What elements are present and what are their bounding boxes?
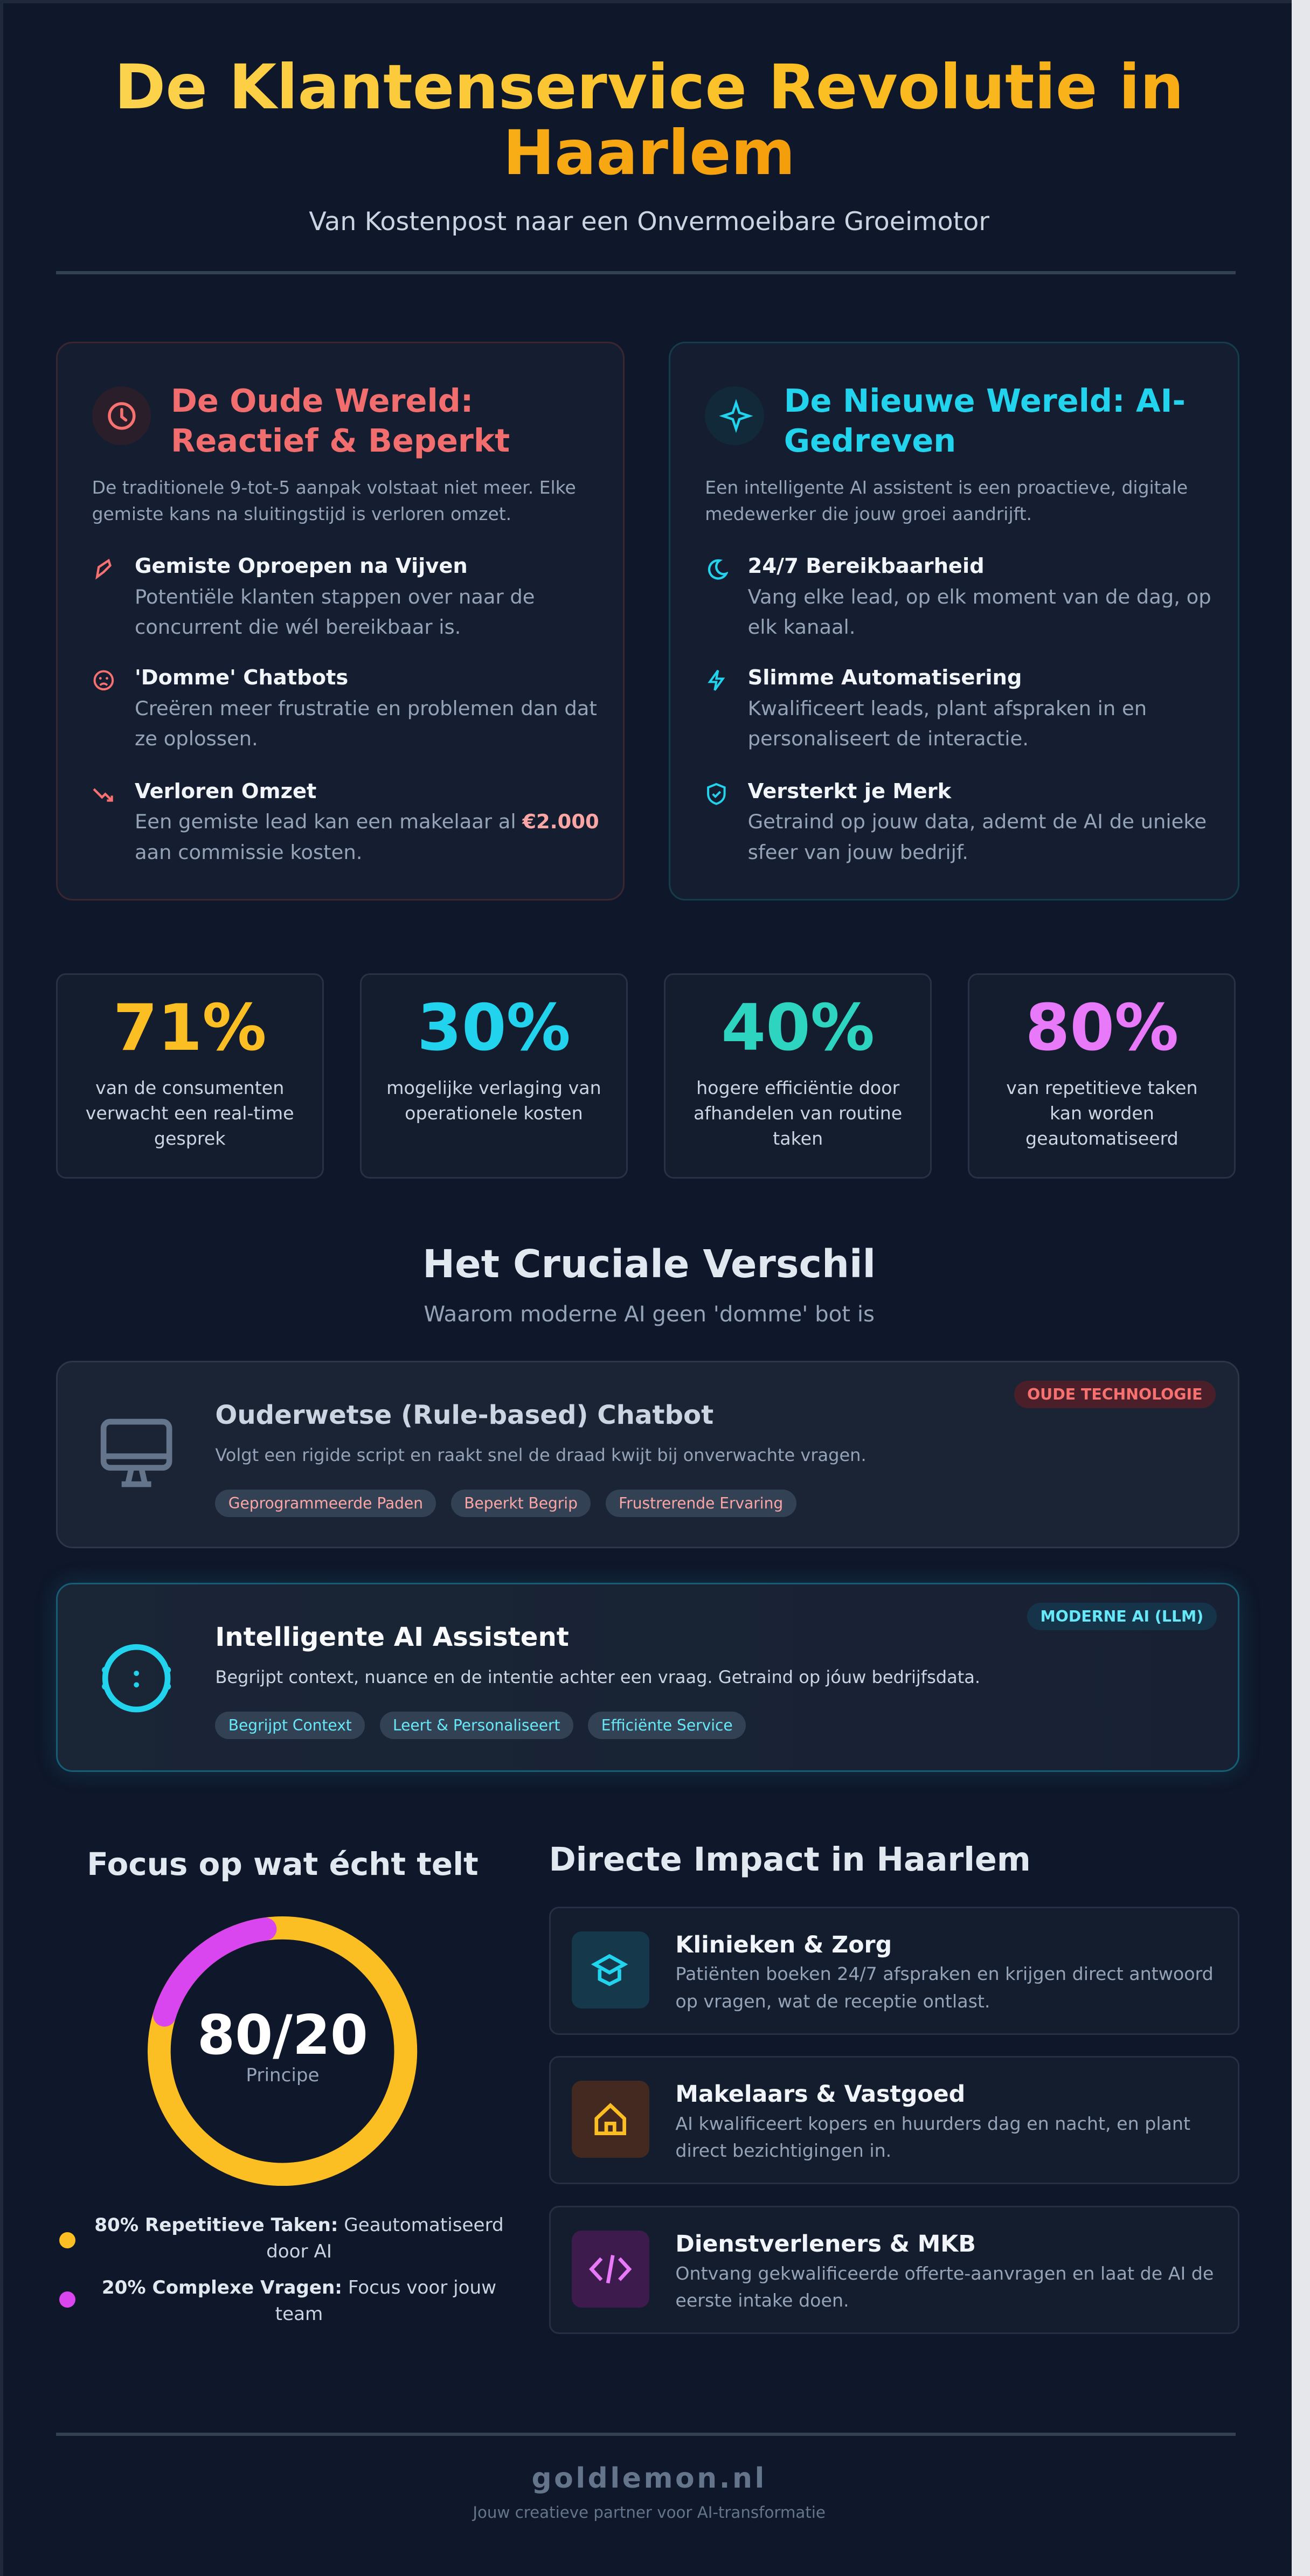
title: De Klantenservice Revolutie in: [114, 51, 1184, 123]
section heading: crucial difference: Het Cruciale Verschil: [422, 1241, 876, 1286]
stat: 71%: [56, 973, 324, 1179]
stat: 30%: [360, 973, 628, 1179]
donut chart 80/20: Principe: [246, 2065, 320, 2086]
stat: 80%: [968, 973, 1236, 1179]
tags: Geprogrammeerde Paden: [228, 1494, 423, 1512]
tags: Begrijpt Context: [228, 1716, 352, 1734]
panel: new world: Getraind op jouw data, ademt de AI de unieke sfeer van jouw bedrijf.: [748, 810, 1207, 864]
icon: clock: [92, 386, 151, 445]
tags: Frustrerende Ervaring: [619, 1494, 783, 1512]
panel: new world: Versterkt je Merk: [748, 779, 951, 804]
impact card: real estate: AI kwalificeert kopers en huurders dag en nacht, en plant direct bezichtigingen in.: [675, 2113, 1190, 2161]
heading: De Oude Wereld:: [171, 382, 473, 419]
icon: AI face: [102, 1644, 171, 1713]
item: automation: [708, 666, 1147, 750]
heading: Gedreven: [784, 422, 956, 459]
panel: old world: [56, 342, 625, 901]
panel: new world: [669, 342, 1239, 901]
badge: MODERNE AI (LLM): [1040, 1608, 1203, 1625]
description: Volgt een rigide script en raakt snel de draad kwijt bij onverwachte vragen.: [215, 1445, 867, 1465]
impact card: services: Dienstverleners & MKB: [675, 2231, 976, 2258]
panel: new world: 24/7 Bereikbaarheid: [748, 554, 985, 578]
donut chart 80/20: [148, 1916, 417, 2186]
panel: old world: Gemiste Oproepen na Vijven: [135, 554, 468, 578]
impact card: clinics: Patiënten boeken 24/7 afspraken en krijgen direct antwoord op vragen, wat de receptie ontlast.: [675, 1963, 1214, 2012]
badge: OUDE TECHNOLOGIE: [1027, 1386, 1202, 1403]
tags: Leert & Personaliseert: [393, 1716, 560, 1734]
panel: old world: Creëren meer frustratie en problemen dan dat ze oplossen.: [135, 697, 597, 750]
description: Een intelligente AI assistent is een proactieve, digitale medewerker die jouw groei aandrijft.: [705, 477, 1188, 524]
panel: new world: Slimme Automatisering: [748, 666, 1022, 690]
icon: monitor: [100, 1418, 172, 1487]
title: [114, 51, 1184, 189]
stat: 40%: hogere efficiëntie door afhandelen van routine taken: [694, 1077, 902, 1149]
stat: 71%: 71%: [113, 991, 266, 1065]
title: Intelligente AI Assistent: [215, 1622, 569, 1652]
stat: 30%: 30%: [417, 991, 571, 1065]
footer brand: goldlemon.nl: [531, 2462, 767, 2495]
panel: AI assistant: [56, 1583, 1239, 1772]
item: chatbots: [94, 666, 597, 750]
tags: [215, 1490, 796, 1517]
tags: [215, 1712, 746, 1739]
panel: old world: Potentiële klanten stappen over naar de concurrent die wél bereikbaar is.: [135, 585, 535, 639]
heading: Reactief & Beperkt: [171, 422, 510, 459]
panel: old chatbot: [56, 1361, 1239, 1548]
heading: [171, 382, 510, 459]
stat: 40%: 40%: [721, 991, 875, 1065]
item: brand: [707, 779, 1207, 864]
impact card: clinics: [549, 1907, 1239, 2035]
donut chart 80/20: 80/20: [197, 2004, 368, 2067]
panel: new world: Kwalificeert leads, plant afspraken in en personaliseert de interactie.: [748, 697, 1147, 750]
legend: [59, 2214, 504, 2325]
stat: 80%: van repetitieve taken kan worden geautomatiseerd: [1006, 1077, 1198, 1149]
impact card: services: Ontvang gekwalificeerde offerte-aanvragen en laat de AI de eerste intake doen.: [675, 2263, 1214, 2311]
description: De traditionele 9-tot-5 aanpak volstaat niet meer. Elke gemiste kans na sluitingstijd is verloren omzet.: [92, 477, 576, 524]
panel: old world: Verloren Omzet: [135, 779, 316, 804]
legend: 20% Complexe Vragen: Focus voor jouw team: [102, 2277, 496, 2325]
tags: Efficiënte Service: [601, 1716, 733, 1734]
description: Begrijpt context, nuance en de intentie achter een vraag. Getraind op jóuw bedrijfsdata.: [215, 1667, 980, 1687]
impact card: real estate: Makelaars & Vastgoed: [675, 2081, 965, 2108]
badge: [1027, 1603, 1217, 1630]
panel: new world: Vang elke lead, op elk moment van de dag, op elk kanaal.: [748, 585, 1211, 639]
stat: 80%: 80%: [1025, 991, 1179, 1065]
heading: direct impact: Directe Impact in Haarlem: [549, 1841, 1031, 1879]
impact card: real estate: [549, 2056, 1239, 2184]
heading: De Nieuwe Wereld: AI-: [784, 382, 1186, 419]
heading: [784, 382, 1186, 459]
impact card: clinics: Klinieken & Zorg: [675, 1931, 892, 1958]
panel: old world: 'Domme' Chatbots: [135, 666, 348, 690]
badge: [1014, 1381, 1216, 1408]
item: 24/7: [708, 554, 1211, 639]
item: missed calls: [95, 554, 535, 639]
stat: 30%: mogelijke verlaging van operationele kosten: [386, 1077, 601, 1124]
tags: Beperkt Begrip: [464, 1494, 578, 1512]
stat: 40%: [664, 973, 932, 1179]
item: lost revenue: [93, 779, 599, 864]
panel: old world: Een gemiste lead kan een makelaar al €2.000 aan commissie kosten.: [135, 810, 599, 864]
icon: sparkles: [705, 386, 764, 445]
title: Ouderwetse (Rule-based) Chatbot: [215, 1400, 713, 1430]
heading: focus: Focus op wat écht telt: [87, 1846, 479, 1882]
subtitle: Van Kostenpost naar een Onvermoeibare Groeimotor: [309, 207, 989, 237]
legend: 80% Repetitieve Taken: Geautomatiseerd door AI: [94, 2214, 504, 2262]
stat: 71%: van de consumenten verwacht een real-time gesprek: [86, 1077, 294, 1149]
section subtitle: Waarom moderne AI geen 'domme' bot is: [424, 1302, 875, 1327]
title: Haarlem: [503, 117, 795, 189]
footer tagline: Jouw creatieve partner voor AI-transformatie: [473, 2503, 826, 2522]
impact card: services: [549, 2206, 1239, 2334]
